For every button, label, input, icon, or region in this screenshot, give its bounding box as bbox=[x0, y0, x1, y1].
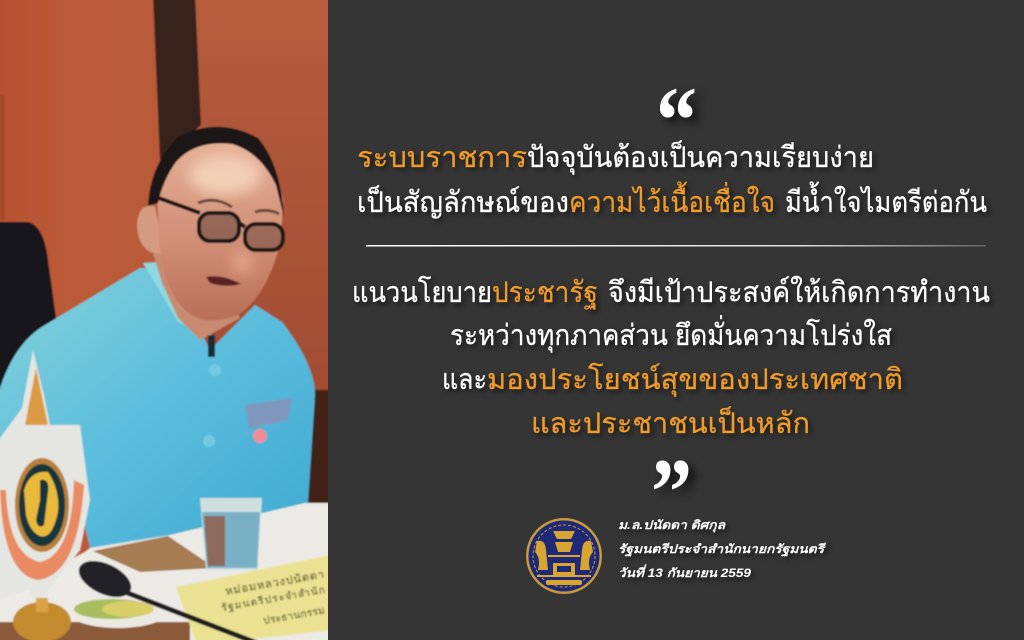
line 1: ระบบราชการ bbox=[357, 142, 527, 174]
panel: dark background bbox=[328, 0, 1024, 640]
divider line bbox=[366, 245, 986, 246]
photo: name plate: รัฐมนตรีประจำสำนัก bbox=[220, 584, 326, 614]
photo: hair bbox=[148, 127, 284, 218]
photo: plate with food bbox=[71, 599, 165, 628]
line 5: และ bbox=[442, 364, 487, 396]
photo: suit bbox=[0, 268, 315, 548]
line 3: จึงมีเป้าประสงค์ให้เกิดการทำงาน bbox=[608, 275, 990, 309]
photo: name plate: ประธานกรรม bbox=[262, 604, 326, 627]
line 2: มีน้ำใจไมตรีต่อกัน bbox=[785, 181, 987, 219]
line 5: มองประโยชน์สุขของประเทศชาติ bbox=[487, 362, 903, 397]
photo: microphone bbox=[78, 560, 258, 640]
caption: author and date bbox=[618, 518, 827, 580]
opening quotation mark: “ bbox=[656, 67, 697, 173]
line 3: ประชารัฐ bbox=[492, 277, 598, 310]
line 2 bbox=[357, 181, 987, 219]
photo: desk papers and table bbox=[0, 503, 335, 640]
photo: collar opening bbox=[208, 335, 215, 357]
photo background: orange wood wall bbox=[0, 0, 328, 558]
line 2: ความไว้เนื้อเชื่อใจ bbox=[569, 181, 775, 219]
line 4: ระหว่างทุกภาคส่วน ยึดมั่นความโปร่งใส bbox=[450, 315, 892, 353]
photo: jacket buttons bbox=[203, 364, 221, 447]
photo: name plate bbox=[176, 554, 335, 640]
photo: pin bbox=[253, 429, 267, 443]
closing quotation mark: ” bbox=[651, 439, 692, 545]
photo: pocket square bbox=[245, 398, 292, 429]
icon: government seal bbox=[526, 518, 602, 594]
line 2: เป็นสัญลักษณ์ของ bbox=[357, 184, 569, 219]
line 6: และประชาชนเป็นหลัก bbox=[531, 405, 810, 440]
photo: glasses bbox=[156, 197, 283, 250]
photo: water glass bbox=[200, 498, 262, 570]
caption: author and date: วันที่ 13 กันยายน 2559 bbox=[618, 564, 751, 580]
caption: author and date: ม.ล.ปนัดดา ดิศกุล bbox=[618, 518, 726, 533]
quote: first paragraph bbox=[357, 139, 987, 219]
photo: black chair bbox=[0, 222, 57, 395]
line 1 bbox=[357, 139, 874, 175]
line 1: ปัจจุบันต้องเป็นความเรียบง่าย bbox=[527, 139, 874, 175]
photo: neck and face bbox=[137, 136, 283, 340]
line 3 bbox=[352, 275, 990, 310]
quote: second paragraph bbox=[352, 275, 990, 440]
panel: photo of the minister bbox=[0, 0, 336, 640]
photo: emblem on desk bbox=[0, 350, 90, 640]
photo: name plate: หม่อมหลวงปนัดดา bbox=[224, 568, 325, 598]
line 3: แนวนโยบาย bbox=[352, 275, 492, 309]
caption: author and date: รัฐมนตรีประจำสำนักนายกรัฐมนตรี bbox=[618, 542, 827, 557]
